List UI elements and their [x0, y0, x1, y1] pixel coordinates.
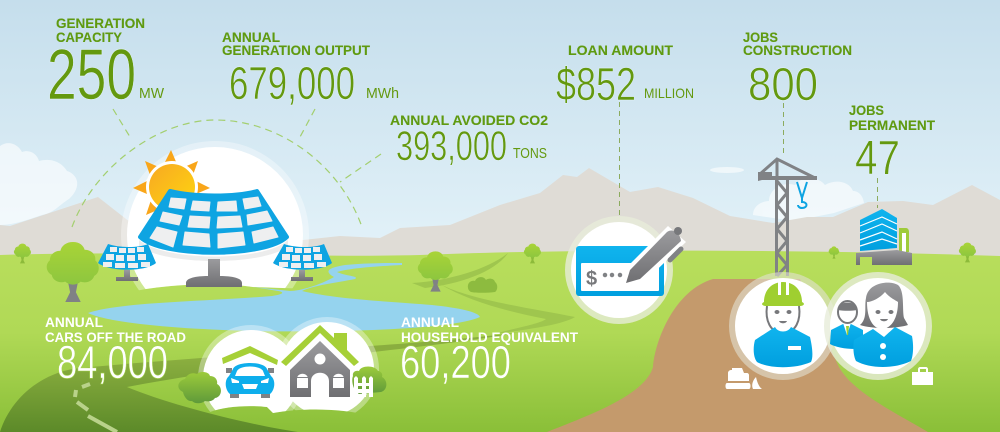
- text: loan amount: LOAN AMOUNT: [568, 43, 674, 58]
- text: annual avoided co2: TONS: [513, 145, 547, 162]
- halo circle: [121, 141, 309, 290]
- text: jobs construction: [743, 30, 852, 110]
- text: cars off the road: ANNUAL: [45, 315, 103, 330]
- icon: bush left: [178, 372, 221, 403]
- text: annual avoided co2: ANNUAL AVOIDED CO2: [390, 113, 548, 128]
- text: annual generation output: GENERATION OUTPUT: [222, 43, 371, 58]
- icon: sun: [133, 150, 210, 215]
- circles: [198, 317, 379, 413]
- dashed arc and leaders: [72, 109, 381, 227]
- icon: car: [226, 363, 274, 398]
- text: household equivalent: [400, 315, 579, 388]
- text: jobs permanent: 47: [855, 132, 900, 185]
- text: generation capacity: CAPACITY: [56, 30, 122, 45]
- green ground: [0, 251, 1000, 432]
- text: jobs permanent: [849, 103, 936, 185]
- panel: construction worker: [726, 272, 837, 389]
- icon: bush right: [352, 366, 386, 394]
- text: annual generation output: ANNUAL: [222, 30, 280, 45]
- tree: centre: [418, 251, 453, 292]
- icon: cheque: $: [586, 268, 597, 290]
- text: jobs permanent: PERMANENT: [849, 118, 936, 133]
- text: generation capacity: MW: [139, 85, 165, 102]
- icon: left small solar panel: [98, 244, 156, 281]
- icon: man: [830, 301, 863, 349]
- text: loan amount: MILLION: [644, 85, 694, 101]
- river and pond: [88, 263, 480, 331]
- icon: right small solar panel: [273, 244, 332, 281]
- winding trail: [412, 253, 575, 335]
- text: loan amount: [556, 43, 694, 110]
- icon: large solar panel: [139, 191, 288, 287]
- text: jobs construction: CONSTRUCTION: [743, 43, 852, 58]
- text: household equivalent: ANNUAL: [401, 315, 459, 330]
- icon: bulldozer: [726, 368, 762, 389]
- text: annual generation output: MWh: [366, 85, 399, 102]
- text: household equivalent: HOUSEHOLD EQUIVALENT: [401, 330, 579, 345]
- text: household equivalent: 60,200: [400, 336, 511, 388]
- mountains: [0, 168, 1000, 262]
- tree: near crane: [829, 246, 839, 259]
- icon: woman: [853, 283, 913, 367]
- icon: garage roof: [222, 346, 278, 365]
- text: generation capacity: 250: [47, 36, 136, 115]
- icon: worker: [754, 281, 812, 367]
- panel: solar array: [88, 141, 480, 331]
- text: loan amount: $852: [556, 58, 636, 110]
- icon: fence: [354, 376, 373, 397]
- text: cars off the road: CARS OFF THE ROAD: [45, 330, 186, 345]
- tree: mid right: [524, 244, 541, 263]
- text: jobs construction: 800: [748, 58, 818, 110]
- panel: loan cheque: [565, 216, 686, 324]
- tree: far right: [959, 243, 976, 262]
- text: jobs permanent: JOBS: [849, 103, 884, 118]
- leader lines: [620, 102, 878, 217]
- text: jobs construction: JOBS: [743, 30, 778, 45]
- icon: crane: [758, 159, 817, 276]
- icon: pen: [622, 226, 686, 286]
- tree: large: [47, 242, 99, 302]
- text: cars off the road: 84,000: [57, 336, 168, 388]
- clouds: [0, 143, 864, 225]
- icon: office building: [856, 209, 912, 265]
- text: annual generation output: 679,000: [229, 57, 355, 109]
- dirt road: [547, 279, 928, 432]
- dark winding road: [0, 332, 520, 432]
- icon: briefcase: [912, 367, 933, 385]
- text: generation capacity: GENERATION: [56, 16, 145, 31]
- panel: cars and home: [178, 317, 386, 413]
- bushes: [468, 277, 497, 293]
- text: annual avoided co2: 393,000: [396, 122, 507, 169]
- icon: house: [281, 325, 359, 397]
- text: annual generation output: [222, 30, 399, 109]
- hook: [797, 182, 807, 208]
- tree: far left: [14, 244, 31, 263]
- text: cars off the road: [45, 315, 186, 388]
- panel: permanent staff: [824, 272, 933, 385]
